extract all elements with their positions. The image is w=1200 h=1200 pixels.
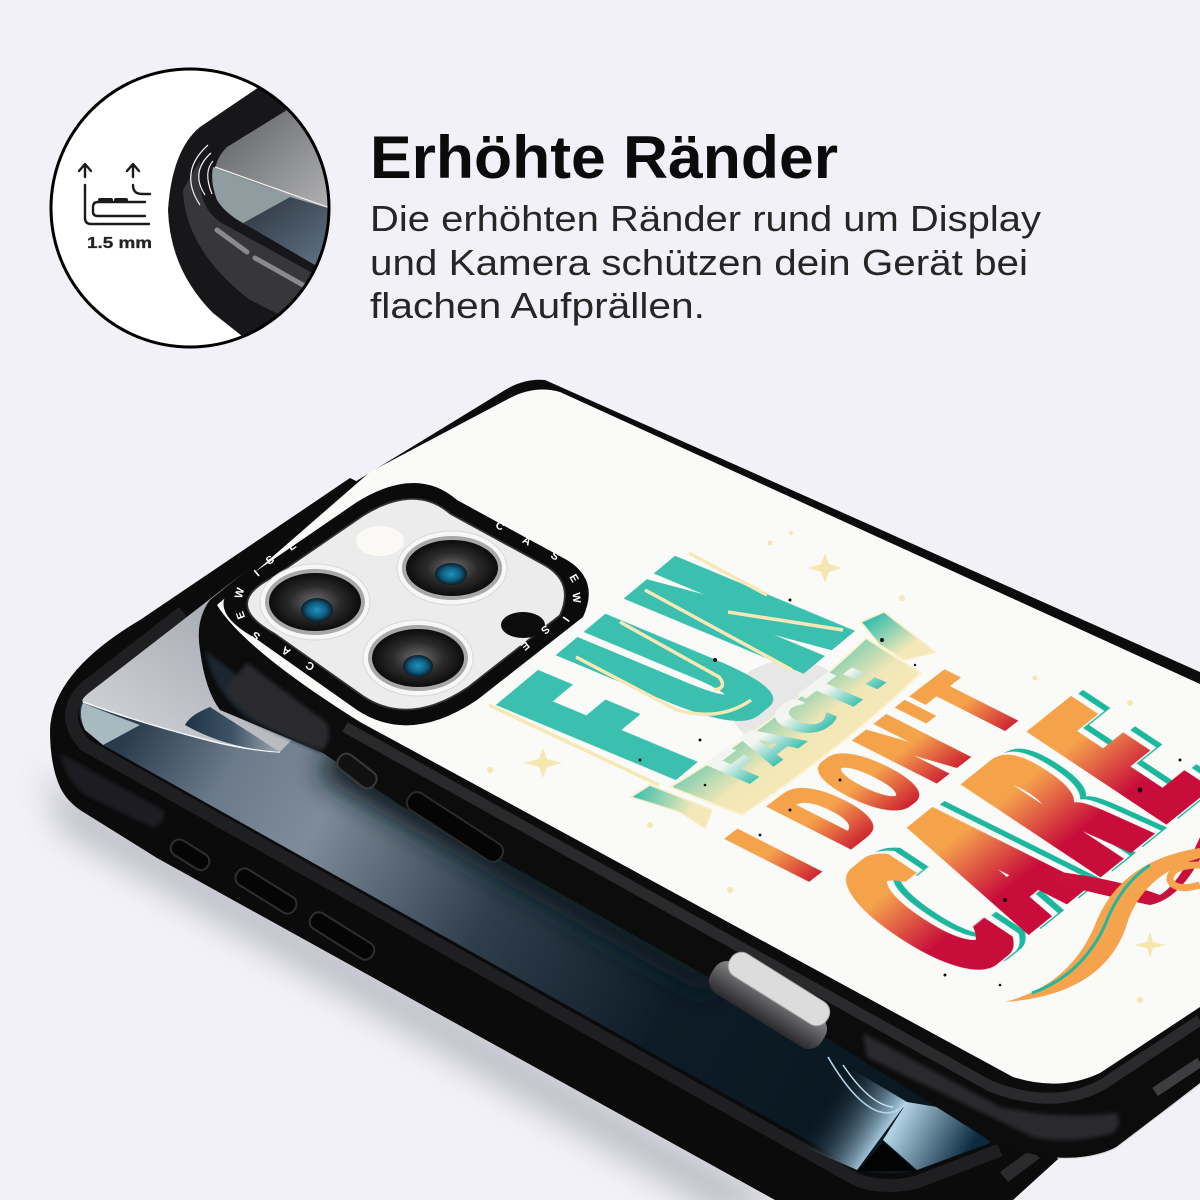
back phone button: action — [168, 836, 212, 873]
rim highlight — [345, 727, 1200, 1098]
inset circle: raised edge detail — [51, 69, 340, 347]
back rim highlight — [72, 612, 1000, 1186]
orange swash — [1005, 848, 1200, 1002]
inset phone corner — [168, 85, 340, 340]
speaker grille — [1155, 1062, 1200, 1092]
back phone port screw — [1000, 1150, 1040, 1182]
inset background — [52, 70, 328, 346]
front phone shadow on screen — [330, 755, 720, 975]
CASEWISE ring lettering: E — [518, 638, 531, 652]
CASEWISE ring lettering: I — [560, 614, 571, 623]
front phone bumper — [199, 380, 1200, 1158]
back screen dark wedge — [185, 707, 280, 752]
CASEWISE ring lettering: S — [548, 549, 561, 563]
lens bottom — [363, 620, 473, 696]
body text: flachen Aufprällen. — [370, 285, 705, 326]
inset screen grey — [215, 110, 328, 226]
teal swash — [1032, 865, 1150, 993]
camera ring — [224, 483, 589, 725]
lens top right — [397, 531, 507, 605]
back screen reflection curve — [83, 702, 280, 752]
bottom edge light — [1057, 1084, 1200, 1158]
CASEWISE ring lettering: A — [280, 643, 293, 658]
CASEWISE ring lettering: E — [567, 572, 581, 585]
inset border — [51, 69, 329, 347]
CASEWISE ring lettering: A — [520, 534, 533, 549]
CASEWISE ring lettering: S — [264, 554, 277, 568]
red swash — [1064, 837, 1200, 905]
paint speckles — [638, 598, 1182, 986]
back phone button: volume up — [232, 865, 300, 917]
left corner pillow — [225, 663, 329, 750]
body text — [370, 198, 1041, 326]
heading: Erhöhte Ränder — [370, 124, 838, 191]
label: 1.5 mm: 1.5 mm — [87, 235, 152, 252]
microphone hole — [501, 612, 545, 638]
CASEWISE ring lettering: E — [234, 610, 248, 621]
inset translucent band — [183, 160, 312, 314]
inset impact arcs — [191, 145, 213, 205]
camera flash — [356, 526, 404, 556]
FACT banner — [670, 638, 921, 815]
CASEWISE ring lettering: E — [286, 540, 299, 554]
inset screen pale — [212, 167, 290, 223]
bottom corner pillow — [863, 1033, 1119, 1140]
front side navy tint — [205, 650, 323, 753]
inset highlight strip — [217, 230, 303, 285]
banner shadow — [734, 662, 828, 734]
banner left tail — [631, 785, 712, 828]
body text: Die erhöhten Ränder rund um Display — [370, 198, 1041, 239]
mute switch — [334, 750, 380, 792]
back phone screen — [80, 540, 1000, 1174]
word: FACT:: FACT: — [689, 652, 909, 793]
back phone bumper — [50, 478, 1070, 1200]
CASEWISE ring lettering: C — [493, 519, 506, 534]
CASEWISE ring lettering: W — [233, 586, 247, 600]
CASEWISE ring lettering — [233, 519, 582, 673]
sparkle stars — [487, 531, 1166, 1003]
icon: raised lip arrows — [79, 164, 150, 224]
back phone drop shadow — [45, 770, 790, 1200]
CASEWISE ring lettering: I — [252, 568, 262, 579]
body text: und Kamera schützen dein Gerät bei — [370, 242, 1028, 283]
FUN cream inlines — [489, 553, 843, 785]
side button — [403, 789, 507, 865]
camera island — [247, 499, 565, 710]
back screen grey wallpaper — [82, 560, 330, 752]
back screen wallpaper bottom — [800, 1050, 990, 1171]
words: I DON'T: I DON'T — [699, 655, 1060, 897]
CASEWISE ring lettering: W — [570, 592, 582, 604]
camera module — [224, 483, 589, 725]
front phone case — [199, 380, 1200, 1158]
front phone face — [217, 390, 1200, 1084]
back phone case — [50, 478, 1070, 1200]
word: FUN: FUN — [446, 521, 931, 805]
back screen light wedge — [81, 703, 140, 745]
banner right tail — [861, 612, 935, 660]
back phone button: volume down — [307, 909, 377, 963]
inset reflection line — [215, 167, 330, 208]
inset bumper — [168, 88, 315, 336]
inset screen dark — [244, 197, 328, 265]
back bumper corner pillow — [60, 753, 164, 828]
lens left — [260, 564, 370, 640]
CASEWISE ring lettering: S — [250, 628, 263, 642]
swash curl — [1170, 865, 1200, 888]
case artwork — [487, 531, 1200, 1003]
CASEWISE ring lettering: S — [538, 622, 552, 636]
CASEWISE ring lettering: C — [304, 658, 317, 673]
charging port — [703, 948, 834, 1055]
